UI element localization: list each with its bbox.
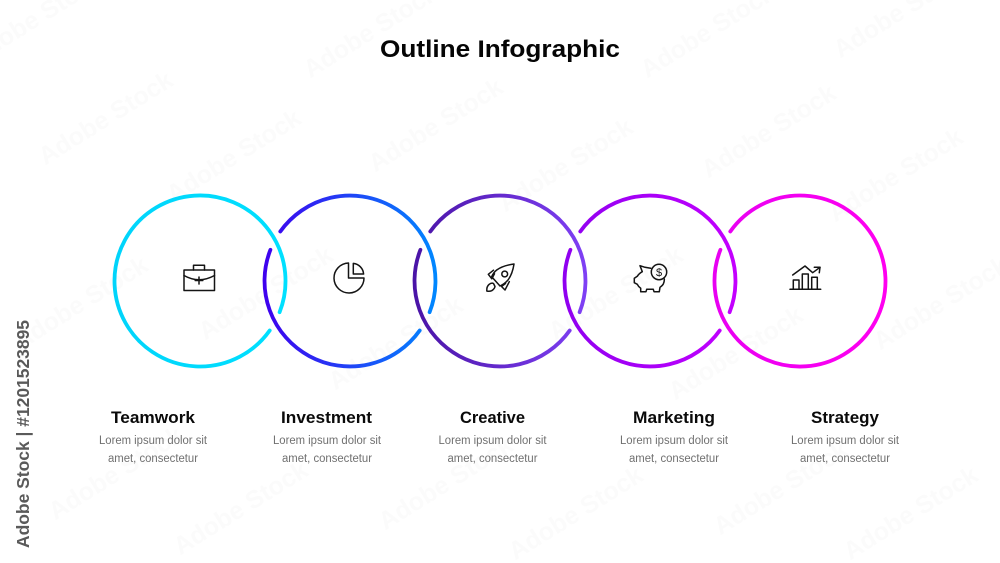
watermark pattern: Adobe Stock xyxy=(664,301,808,406)
icon: piggy bank with coin xyxy=(634,264,667,292)
label: Teamwork: Lorem ipsum dolor sit xyxy=(99,435,208,447)
stock id caption: Adobe Stock | #1201523895 xyxy=(13,320,33,548)
watermark pattern: Adobe Stock xyxy=(169,456,313,561)
label: Teamwork: Teamwork xyxy=(111,409,196,427)
watermark pattern: Adobe Stock xyxy=(374,431,518,536)
watermark pattern: Adobe Stock xyxy=(494,113,638,218)
ring 1: cyan xyxy=(115,195,286,366)
label: Investment: Lorem ipsum dolor sit xyxy=(273,435,382,447)
label: Investment: Investment xyxy=(281,409,373,427)
ring 2: blue xyxy=(265,196,435,366)
label: Investment: amet, consectetur xyxy=(282,453,372,465)
ring 5: magenta xyxy=(714,196,885,367)
title: Outline Infographic xyxy=(380,36,620,63)
label: Creative: Lorem ipsum dolor sit xyxy=(438,435,547,447)
watermark pattern: Adobe Stock xyxy=(162,104,306,209)
watermark pattern: Adobe Stock xyxy=(9,251,153,356)
label: Marketing: Lorem ipsum dolor sit xyxy=(620,435,729,447)
watermark pattern: Adobe Stock xyxy=(364,73,508,178)
icon: pie chart xyxy=(334,263,364,293)
watermark pattern: Adobe Stock xyxy=(194,241,338,346)
label: Strategy: Lorem ipsum dolor sit xyxy=(791,435,900,447)
watermark pattern: Adobe Stock xyxy=(697,79,841,184)
label: Strategy: amet, consectetur xyxy=(800,453,890,465)
watermark pattern: Adobe Stock xyxy=(839,461,983,563)
watermark pattern: Adobe Stock xyxy=(824,123,968,228)
watermark pattern: Adobe Stock xyxy=(544,241,688,346)
label: Marketing xyxy=(620,409,729,465)
label: Marketing: Marketing xyxy=(633,409,715,427)
label: Creative xyxy=(438,409,547,465)
icon: piggy bank with coin: $ xyxy=(656,267,662,279)
label: Investment xyxy=(273,409,382,465)
ring 3: violet xyxy=(415,196,585,366)
label: Strategy: Strategy xyxy=(811,409,880,427)
label: Teamwork: amet, consectetur xyxy=(108,453,198,465)
label: Creative: amet, consectetur xyxy=(448,453,538,465)
label: Creative: Creative xyxy=(460,409,525,427)
watermark pattern: Adobe Stock xyxy=(34,66,178,171)
label: Marketing: amet, consectetur xyxy=(629,453,719,465)
label: Teamwork xyxy=(99,409,208,465)
watermark pattern: Adobe Stock xyxy=(709,436,853,541)
watermark pattern: Adobe Stock xyxy=(324,291,468,396)
label: Strategy xyxy=(791,409,900,465)
ring 4: purple xyxy=(565,196,735,366)
watermark pattern: Adobe Stock xyxy=(44,421,188,526)
icon: briefcase xyxy=(184,265,214,290)
icon: bar chart with rising arrow xyxy=(790,266,821,289)
watermark pattern: Adobe Stock xyxy=(504,461,648,563)
icon: rocket xyxy=(487,264,514,291)
